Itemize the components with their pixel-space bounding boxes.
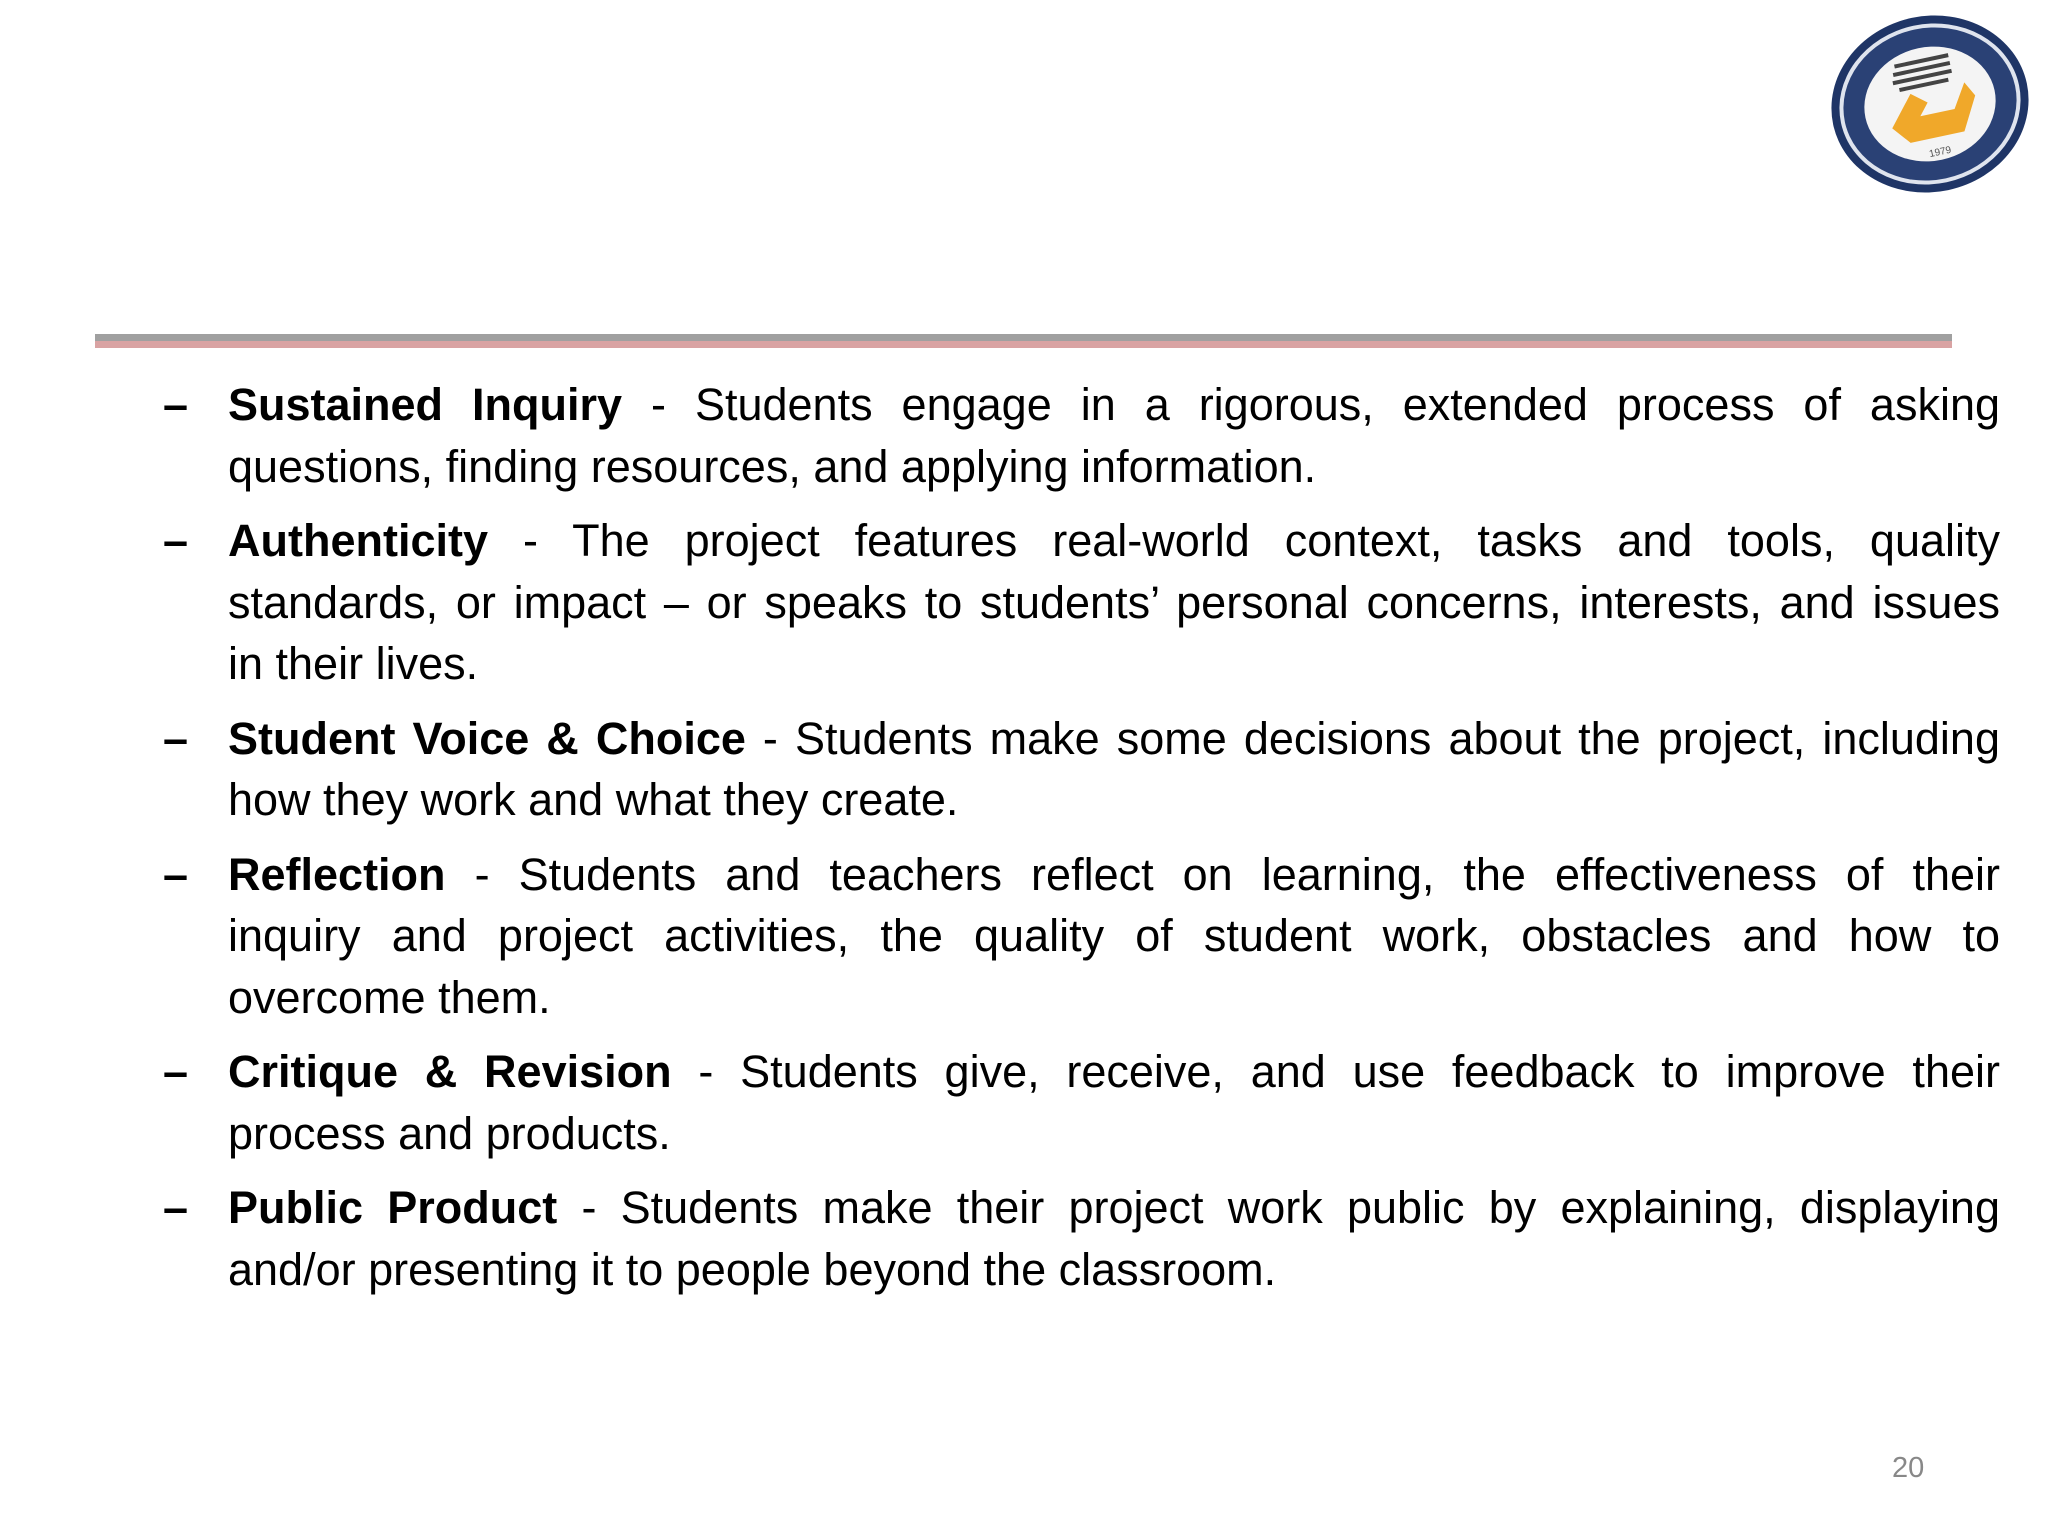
divider line: [95, 334, 1952, 348]
item: voice and choice: [163, 712, 2000, 825]
item: reflection: overcome them.: [228, 972, 551, 1022]
item: reflection: Reflection - Students and teachers reflect on learning, the effectiveness of their: [228, 848, 2000, 900]
item: reflection: –: [163, 848, 188, 900]
item: voice and choice: how they work and what they create.: [228, 774, 958, 825]
item: critique: Critique & Revision - Students give, receive, and use feedback to improve their: [228, 1046, 2000, 1097]
item: authenticity: [163, 515, 2000, 689]
item: critique: –: [163, 1046, 188, 1097]
page number: 20: [1892, 1452, 1924, 1484]
item: public product: and/or presenting it to people beyond the classroom.: [228, 1244, 1276, 1294]
item: sustained inquiry: questions, finding resources, and applying information.: [228, 440, 1316, 492]
item: authenticity: Authenticity - The project features real-world context, tasks and tools, quality: [228, 515, 2000, 566]
logo: 1979: [1928, 145, 1953, 160]
item: authenticity: standards, or impact – or speaks to students’ personal concerns, interests, and issues: [228, 576, 2000, 628]
item: public product: –: [163, 1182, 188, 1233]
item: authenticity: –: [163, 515, 188, 566]
logo: [1831, 16, 2029, 192]
item: reflection: inquiry and project activities, the quality of student work, obstacles and how to: [228, 910, 2000, 961]
item: critique: process and products.: [228, 1108, 671, 1158]
item: sustained inquiry: [163, 379, 2000, 492]
item: reflection: [163, 848, 2000, 1022]
item: public product: [163, 1182, 2000, 1294]
item: authenticity: in their lives.: [228, 638, 478, 689]
bullet list: [163, 379, 2000, 1294]
item: critique: [163, 1046, 2000, 1158]
item: sustained inquiry: –: [163, 379, 188, 430]
item: sustained inquiry: Sustained Inquiry - Students engage in a rigorous, extended process of asking: [228, 379, 2000, 430]
item: public product: Public Product - Students make their project work public by explaining, displaying: [228, 1182, 2000, 1233]
item: voice and choice: –: [163, 712, 188, 764]
item: voice and choice: Student Voice & Choice - Students make some decisions about the project, including: [228, 712, 2000, 764]
